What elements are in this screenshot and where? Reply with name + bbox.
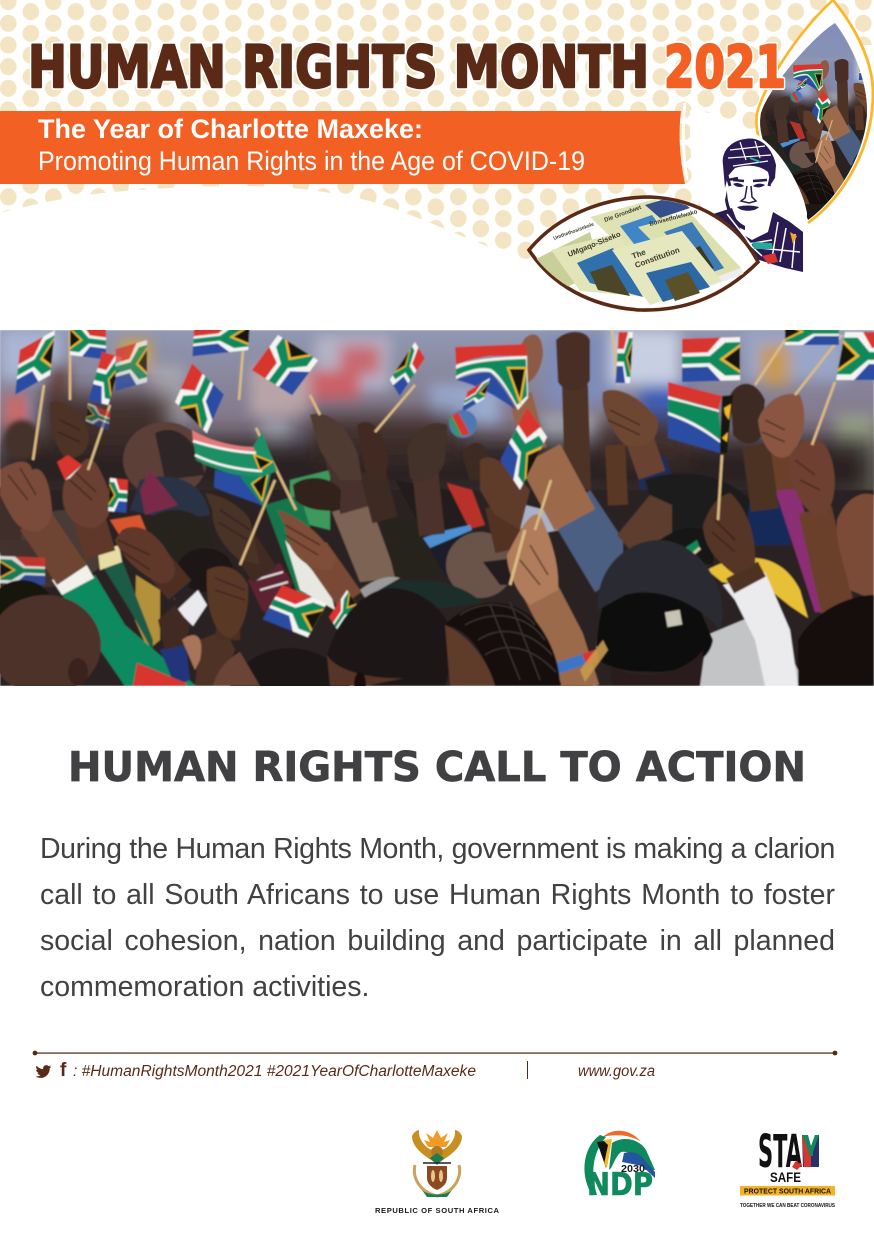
title: 2021 (664, 33, 786, 101)
icon: twitter (36, 1065, 51, 1078)
body paragraph (40, 833, 835, 1003)
logo: Stay Safe: PROTECT SOUTH AFRICA (744, 1186, 831, 1196)
portrait illustration (710, 139, 803, 272)
fists (0, 332, 874, 638)
logo: Stay Safe: TOGETHER WE CAN BEAT CORONAVIRUS (740, 1203, 835, 1209)
big flag right (668, 382, 733, 453)
front books: Umthethosisekele (553, 222, 595, 242)
footer rule (33, 1051, 837, 1055)
orange subtitle banner: The Year of Charlotte Maxeke: (38, 114, 423, 144)
header dotted background (0, 0, 874, 330)
small flag on cap (685, 539, 702, 556)
finger creases (8, 410, 820, 600)
title: HUMAN RIGHTS MONTH (28, 33, 649, 101)
mid crowd shadow (0, 395, 874, 500)
orange subtitle banner: Promoting Human Rights in the Age of COVID-19 (38, 146, 585, 176)
front books: UMgaqo-Siseko (566, 229, 622, 259)
logo: NDP 2030: 2030 (621, 1164, 645, 1175)
body paragraph: During the Human Rights Month, government is making a clarion (40, 833, 835, 865)
back books (530, 196, 744, 290)
flag sticks (33, 330, 842, 648)
small ball flag (449, 410, 477, 438)
title: HUMAN RIGHTS MONTH (28, 33, 649, 101)
icon: facebook: f (60, 1060, 67, 1081)
main crowd photo (0, 318, 874, 752)
logo: NDP 2030: NDP (587, 1167, 653, 1203)
bald head and caps (360, 532, 525, 608)
big flag upper centre (455, 344, 528, 410)
right leaf: crowd photo (755, 0, 874, 224)
bracelet (555, 648, 598, 674)
books leaf (529, 196, 758, 310)
white portrait leaf with Charlotte Maxeke (683, 103, 807, 275)
logo: Stay Safe: SAFE (770, 1170, 801, 1185)
hashtags: : #HumanRightsMonth2021 #2021YearOfCharlotteMaxeke (73, 1063, 476, 1080)
arms (35, 385, 838, 690)
orange subtitle banner (0, 111, 685, 184)
body paragraph: call to all South Africans to use Human Rights Month to foster (40, 879, 835, 911)
logo: Stay Safe: STA (758, 1125, 802, 1178)
logo: Stay Safe (740, 1125, 835, 1209)
big flag left (192, 430, 277, 506)
foreground heads (0, 540, 874, 752)
body paragraph: commemoration activities. (40, 971, 369, 1003)
mid crowd (0, 420, 874, 686)
front books: Bonisetfolelwako (649, 209, 699, 228)
heading: HUMAN RIGHTS CALL TO ACTION (68, 743, 806, 791)
title: 2021 (664, 33, 786, 101)
body paragraph: social cohesion, nation building and participate in all planned (40, 925, 835, 957)
website: www.gov.za (578, 1063, 655, 1080)
front books: The (631, 247, 648, 261)
front books: Die Grondwet (604, 205, 642, 224)
front books (551, 205, 722, 305)
logo: coat of arms: REPUBLIC OF SOUTH AFRICA (375, 1206, 500, 1215)
front books: Constitution (634, 245, 681, 270)
blurred background flags and crowd (0, 330, 874, 490)
clothing (52, 455, 830, 686)
logo: NDP 2030 (584, 1131, 655, 1203)
South African flags (0, 318, 874, 686)
website (527, 1061, 655, 1080)
logo: coat of arms (375, 1130, 500, 1215)
